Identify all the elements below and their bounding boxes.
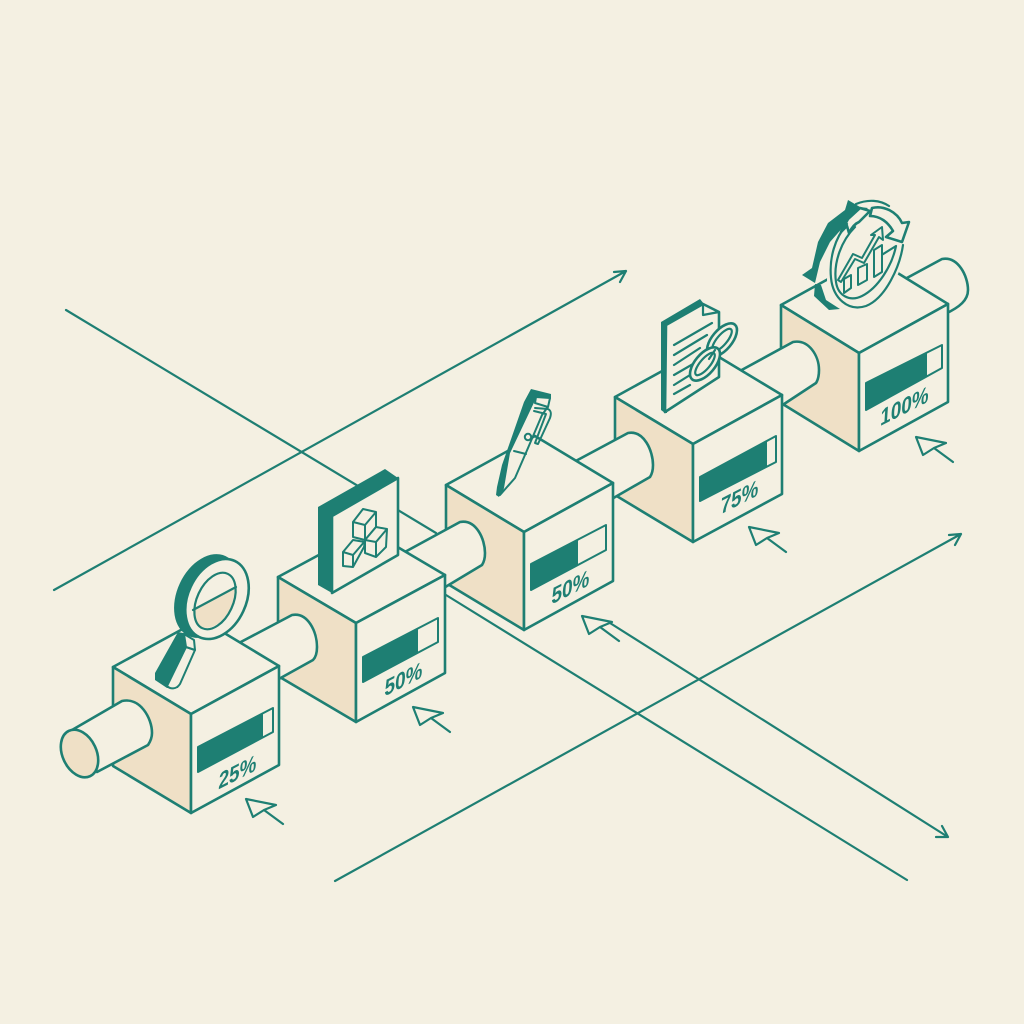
connector: front pipe end [54,701,152,783]
label 50%: 50% [384,656,423,702]
cube 1 left face [113,667,191,813]
icon: magnifying glass [155,543,261,688]
chain links [684,318,743,386]
pen body [500,396,550,495]
dark cycle crescent [802,200,868,283]
label 50%: 50% [551,564,590,610]
bar chart [844,245,882,293]
cube 3 left face [446,485,524,630]
progress bar 5 [866,345,942,410]
cube 3 right face [524,483,613,630]
cube 1 [113,619,279,813]
handle dark side [155,632,195,688]
cube 4 [615,348,782,542]
pen band [514,451,526,454]
handle light side [167,647,195,688]
progress bar 2 [363,618,438,683]
connector: pipe 4 to 5 [738,342,819,408]
connector: pipe 1 to 2 [237,615,317,680]
progress bar 1 [198,708,273,772]
cube 5 [781,256,948,451]
cube 2 right face [356,575,445,722]
label 100%: 100% [879,381,930,432]
cursor arrow 5 [916,437,953,462]
disc outer outline [831,224,903,307]
handle collar [184,634,195,650]
cycle disc [811,199,921,325]
icon: panel with cubes [318,469,398,593]
pen clip [534,408,551,444]
cube 3 top face [446,436,613,532]
document sheet [665,304,719,412]
progress bar 3 [531,525,606,591]
dark upper rim [856,201,889,206]
cube 1 top face [113,619,279,714]
document fold [703,304,719,315]
pipe mouth [54,724,105,783]
cursor arrow 1 [246,799,283,824]
growth arrow [838,227,883,282]
label 25%: 25% [218,749,257,795]
pen cap [535,397,550,407]
cube 1 right face [191,666,279,813]
cube 5 top face [781,256,948,353]
light upper arrow [841,208,870,233]
cursor arrow 3 [582,616,619,641]
icon: cycle with growth chart [802,199,921,325]
lens divider [193,587,236,610]
connector: pipe 2 to 3 [403,522,485,589]
cube 2 top face [278,529,445,623]
connector: pipe 3 to 4 [572,433,653,500]
cube 5 left face [781,305,859,451]
pipe body [72,701,152,772]
document text lines [674,323,712,394]
document thickness [661,299,704,413]
icon: document with chain link [661,299,743,413]
icon: pen [496,389,551,497]
panel thickness [318,469,398,593]
ring face [173,549,261,649]
pen clip ring [525,434,531,440]
line: descending diagonal behind pipeline [66,310,436,533]
cube 5 right face [859,304,948,451]
label 75%: 75% [720,474,759,520]
arrow line: lower ascending diagonal [335,534,961,881]
cube 4 right face [693,395,782,542]
line: lower descending diagonal [446,595,907,880]
cursor arrow 4 [749,527,786,552]
disc inner outline [835,227,896,298]
arrow line: upper diagonal [54,271,626,590]
dark lower crescent [814,284,840,310]
three small cubes [343,509,387,567]
connector: rear pipe end [905,259,968,314]
ring thickness [161,543,253,649]
pen dark side [496,389,551,497]
lens outline [186,566,244,636]
cube 2 left face [278,577,356,722]
progress bar 4 [700,436,776,502]
arrow line: descending to lower right [610,623,948,837]
cube 3 [446,436,613,630]
panel face [332,478,398,593]
cube 4 left face [615,397,693,542]
cube 4 top face [615,348,782,444]
cube 2 [278,529,445,722]
cursor arrow 2 [413,707,450,732]
right cycle arrow [870,207,909,242]
lens lower half [193,587,236,628]
